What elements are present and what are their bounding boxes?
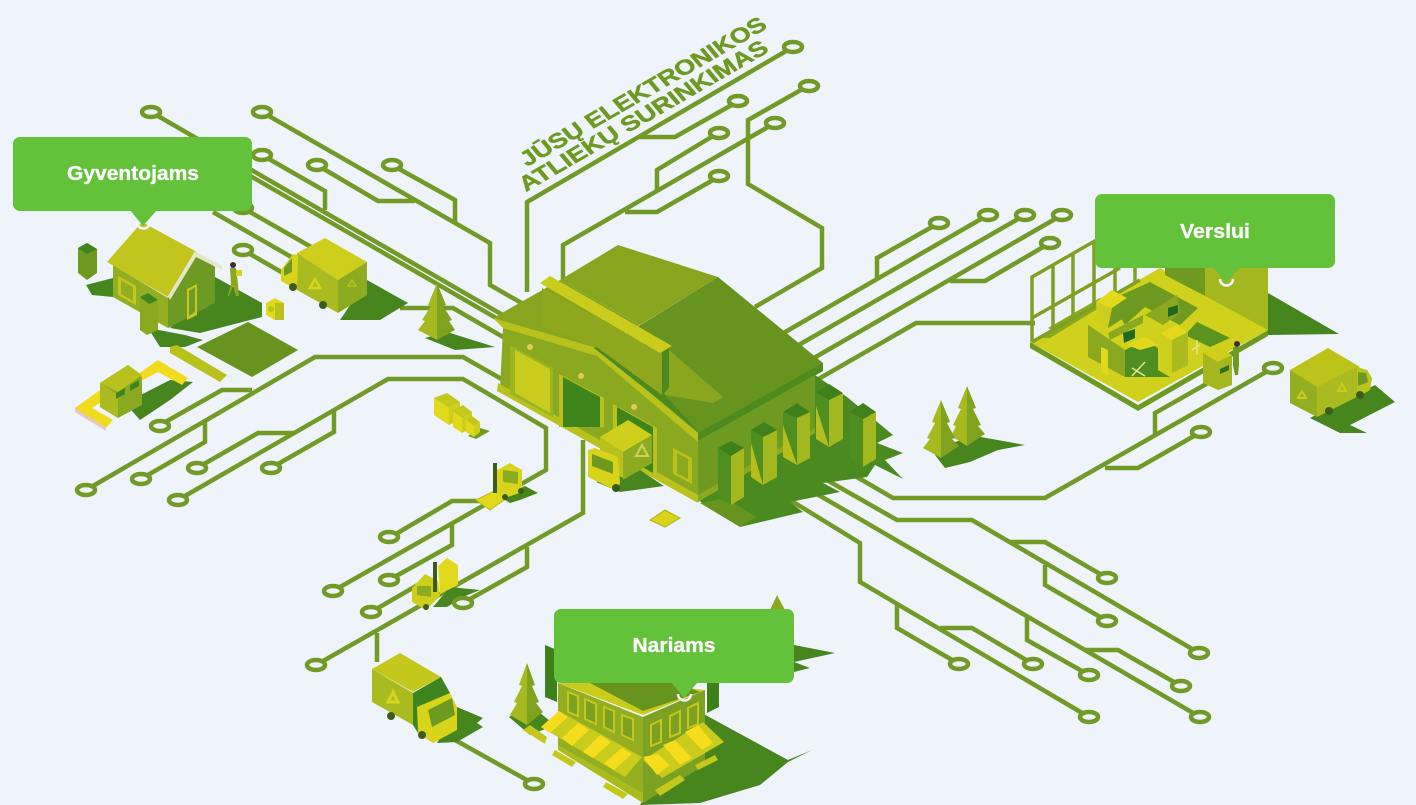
back wall: [1205, 260, 1268, 330]
bench and tables: [523, 725, 718, 799]
warehouse shadow: [698, 375, 903, 527]
rear tree top and shadow: [770, 595, 785, 610]
left tree: [509, 705, 555, 735]
hedge post: [140, 293, 158, 335]
circuit lines: top: [527, 42, 822, 307]
label: Gyventojams: [67, 163, 199, 185]
tree near truck: [418, 283, 495, 350]
house: [78, 222, 298, 382]
ring marker: [678, 694, 691, 700]
roof: [558, 683, 705, 715]
loading door 3: [613, 404, 657, 478]
label: Nariams: [632, 635, 716, 657]
collection truck upper left: [281, 238, 408, 320]
circuit lines: lower right: [790, 363, 1282, 722]
left facade: [558, 683, 643, 803]
wall lamps: [527, 344, 533, 350]
recycling station: [75, 360, 193, 431]
shop building: [509, 595, 835, 805]
warehouse left wall: [500, 328, 698, 502]
circuit lines: lower left: [77, 357, 583, 789]
person: [228, 268, 239, 296]
warehouse roof: [600, 277, 823, 441]
washing machine: [266, 298, 284, 320]
right facade: [643, 690, 705, 803]
office with glass wall: [1030, 238, 1339, 411]
circuit lines: upper right: [780, 210, 1071, 381]
ring marker: [1220, 279, 1233, 286]
callout: Verslui: [1095, 194, 1335, 286]
roof: [107, 222, 197, 297]
central warehouse: [493, 245, 903, 527]
warehouse right wall: [698, 375, 815, 502]
pallet: [650, 510, 680, 527]
floor window shadows: [1040, 298, 1112, 338]
wall window: [673, 448, 692, 484]
left awning: [541, 711, 642, 777]
collection truck bottom: [372, 653, 483, 743]
title: ATLIEKŲ SURINKIMAS: [513, 36, 773, 196]
cubicles: [1185, 322, 1230, 347]
loading door 2: [559, 374, 604, 427]
callout: Gyventojams: [13, 137, 252, 228]
upper wall and parapet: [542, 288, 662, 395]
lawn: [197, 322, 298, 377]
title: [513, 12, 773, 196]
office shadow: [1268, 293, 1339, 335]
worker: [1233, 347, 1239, 375]
glass frame: [1032, 238, 1140, 342]
forklift with boxes: [412, 558, 480, 610]
gable wall: [168, 253, 215, 328]
forklift with pallet: [476, 463, 538, 510]
plank: [170, 345, 227, 382]
roof band: [493, 318, 698, 442]
shop shadow: [640, 712, 812, 805]
loading door 1: [510, 345, 553, 417]
pine trees right: [923, 386, 1025, 468]
circuit lines: upper left: [142, 107, 525, 341]
collection bin: [1203, 347, 1232, 390]
label: Verslui: [1180, 221, 1250, 243]
title: JŪSŲ ELEKTRONIKOS: [514, 12, 772, 171]
right awning: [643, 722, 724, 778]
floor: [1030, 330, 1268, 411]
boxes on pallet: [434, 393, 490, 439]
upper windows: [568, 692, 698, 746]
columns: [718, 384, 876, 505]
house shadow: [170, 277, 262, 333]
ring marker: [137, 222, 150, 228]
collection truck right: [1290, 348, 1395, 433]
front wall: [113, 265, 168, 328]
dock truck: [588, 420, 664, 492]
side pillars: [545, 645, 557, 702]
callout: Nariams: [554, 609, 794, 700]
bin: [78, 243, 97, 280]
